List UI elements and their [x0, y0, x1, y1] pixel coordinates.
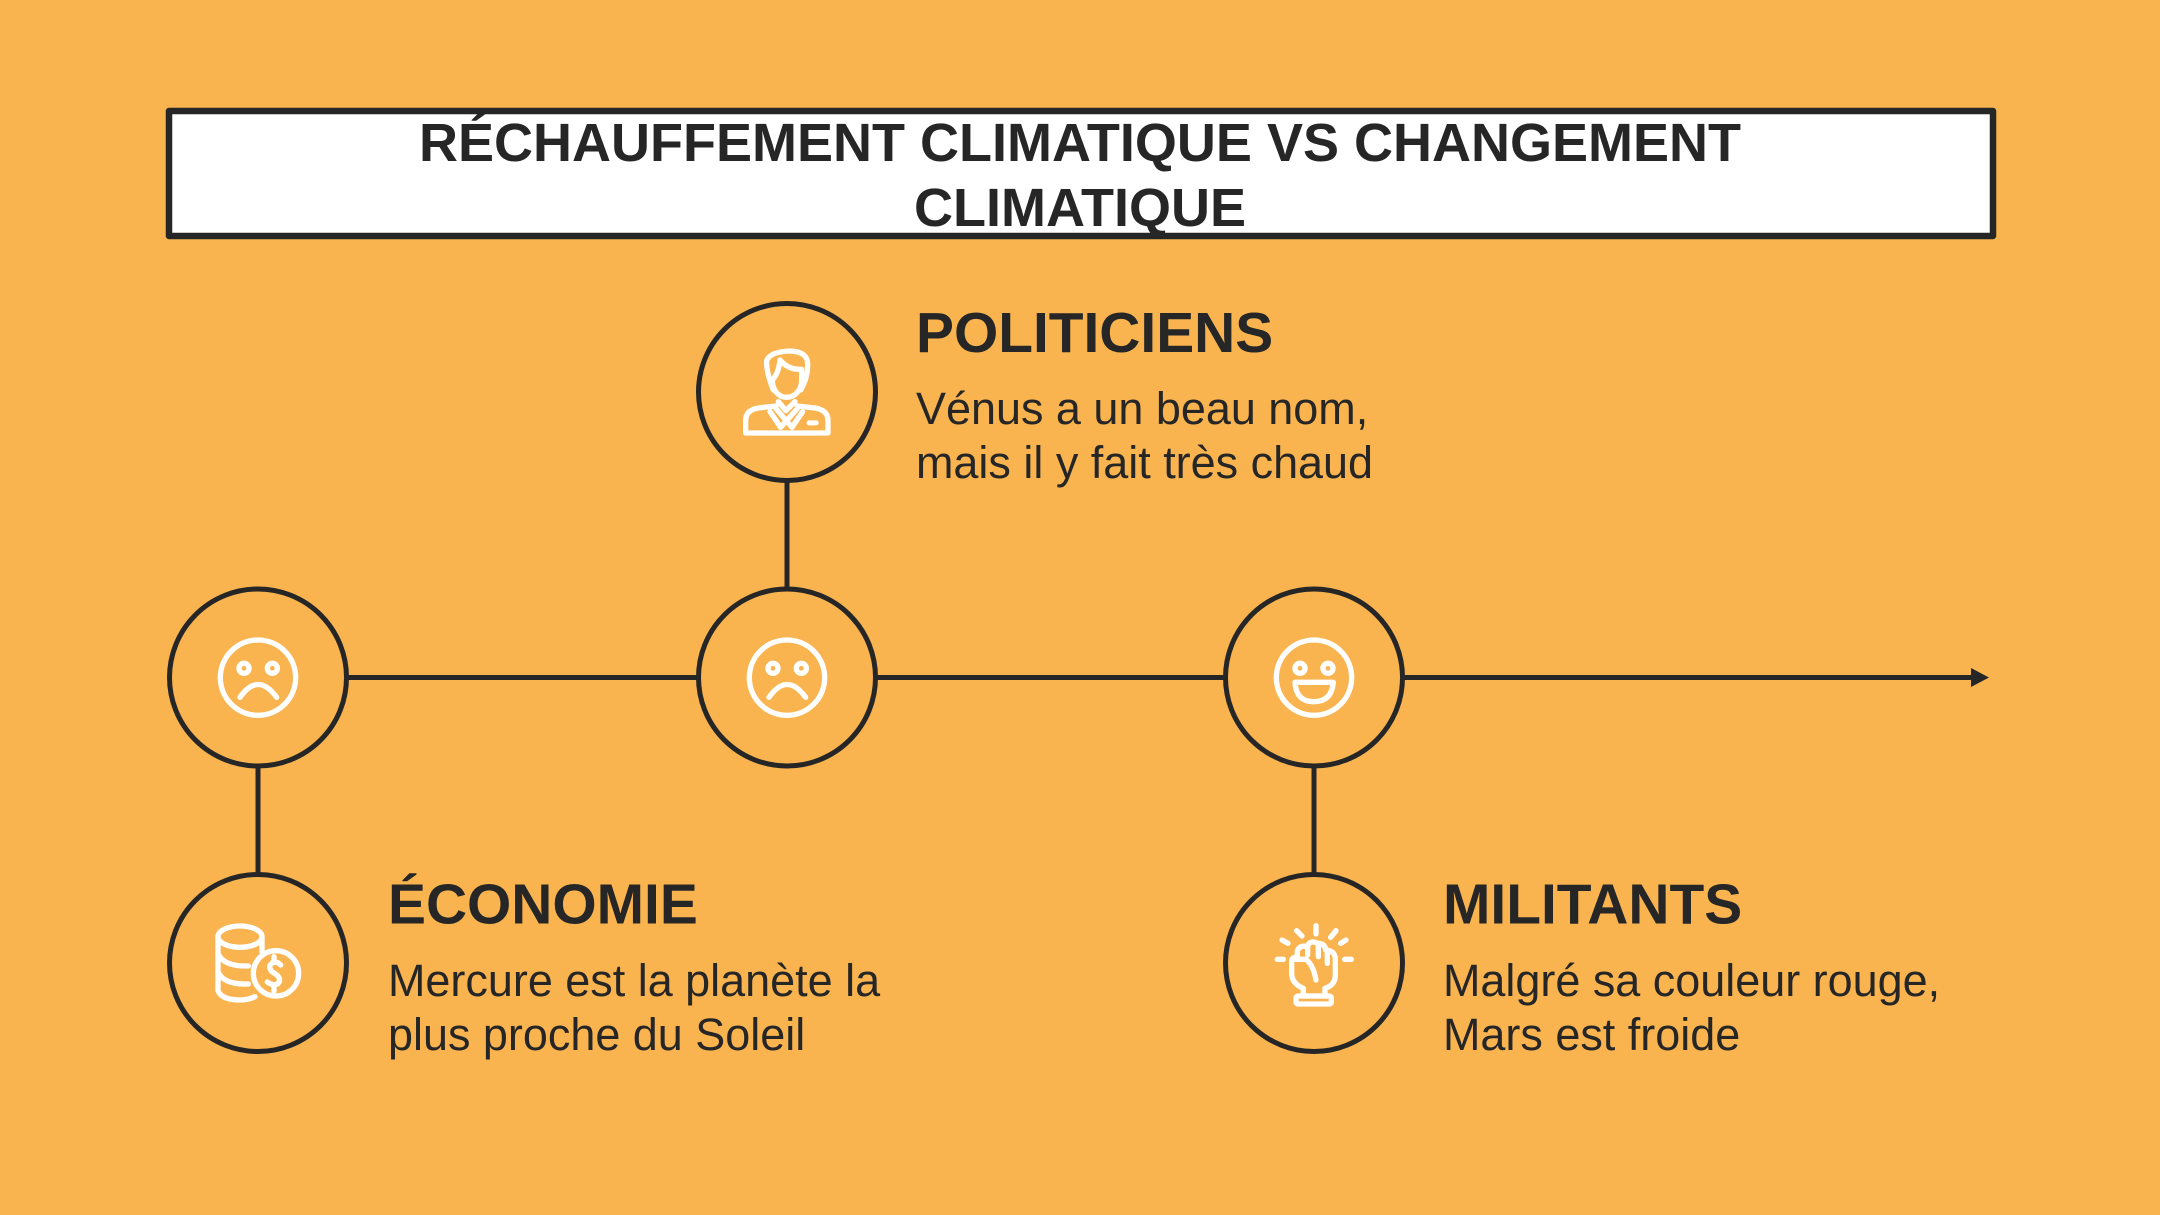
timeline arrow [257, 668, 1989, 687]
text block: politiciens: mais il y fait très chaud [916, 437, 1373, 488]
text block: militants: Malgré sa couleur rouge, [1443, 955, 1940, 1006]
node: raised fist icon [1226, 874, 1402, 1052]
node: sad face middle [698, 589, 876, 766]
node: politician icon [698, 304, 876, 480]
text block: militants: MILITANTS [1443, 872, 1742, 936]
title banner: RÉCHAUFFEMENT CLIMATIQUE VS CHANGEMENT [419, 113, 1741, 173]
text block: politiciens [916, 301, 1373, 488]
text block: militants: Mars est froide [1443, 1009, 1740, 1060]
connector: economie [256, 677, 260, 963]
text block: economie: Mercure est la planète la [388, 955, 880, 1006]
text block: militants [1443, 872, 1940, 1060]
title banner: CLIMATIQUE [914, 178, 1246, 238]
node: coins icon [170, 874, 346, 1052]
title banner [169, 111, 1993, 238]
text block: economie: ÉCONOMIE [388, 872, 698, 936]
text block: economie [388, 872, 880, 1060]
node: sad face left [170, 589, 346, 766]
connector: politiciens [784, 392, 790, 677]
text block: politiciens: Vénus a un beau nom, [916, 383, 1368, 434]
text block: politiciens: POLITICIENS [916, 301, 1273, 365]
text block: economie: plus proche du Soleil [388, 1009, 805, 1060]
connector: militants [1312, 677, 1316, 963]
node: happy face [1226, 589, 1402, 766]
